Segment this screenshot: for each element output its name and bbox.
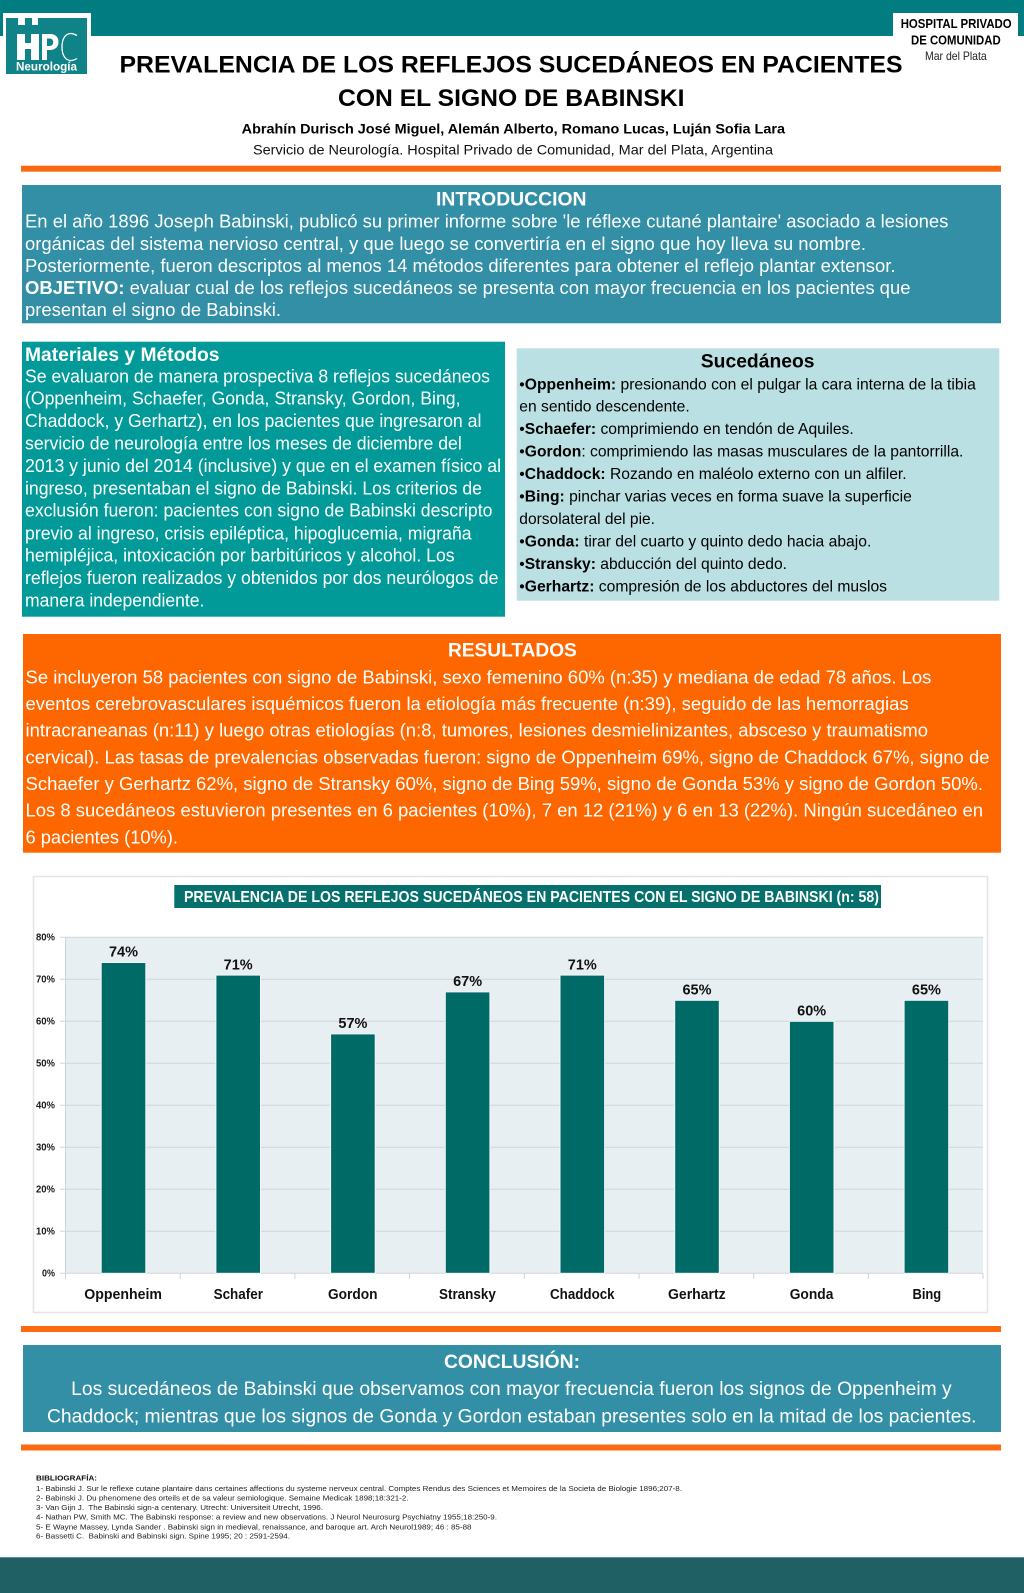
text: bibliografía: BIBLIOGRAFÍA: (36, 1474, 97, 1483)
y axis labels: 70% (36, 974, 55, 986)
text: sucedáneos list: en sentido descendente. (519, 399, 690, 416)
category labels (84, 1287, 941, 1303)
panel: sucedáneos (517, 348, 999, 601)
text: materiales y métodos body: Chaddock, y Gerhartz), en los pacientes que ingresaron al (25, 411, 481, 431)
text: sucedáneos list: •Chaddock: Rozando en maléolo externo con un alfiler. (519, 466, 907, 483)
hospital name label: Mar del Plata (925, 49, 987, 63)
text: resultados body (26, 667, 990, 847)
text: sucedáneos list: •Gonda: tirar del cuarto y quinto dedo hacia abajo. (519, 533, 871, 550)
bar value labels: 74% (109, 945, 138, 961)
bar value labels: 71% (568, 957, 597, 973)
text: resultados body: Schaefer y Gerhartz 62%, signo de Stransky 60%, signo de Bing 59%, signo de Gonda 53% y signo de Gordon 50%. (26, 774, 983, 794)
title (120, 51, 902, 112)
text: materiales y métodos body: manera independiente. (25, 591, 204, 611)
heading: introducción: INTRODUCCION (436, 190, 586, 210)
chart title (174, 885, 881, 908)
panel: resultados (23, 634, 1001, 853)
text: materiales y métodos body: servicio de neurología entre los meses de diciembre del (25, 433, 462, 453)
heading: sucedáneos: Sucedáneos (701, 351, 814, 372)
text: resultados body: 6 pacientes (10%). (26, 827, 178, 847)
text: sucedáneos list: •Gordon: comprimiendo las masas musculares de la pantorrilla. (519, 444, 963, 461)
text: introducción body: OBJETIVO: evaluar cual de los reflejos sucedáneos se presenta con mayor frecuencia en los pacientes que (25, 278, 910, 298)
text: introducción body: presentan el signo de Babinski. (25, 300, 281, 320)
text: resultados body: cervical). Las tasas de prevalencias observadas fueron: signo de Oppenheim 69%, signo de Chaddock 67%, signo de (26, 747, 990, 767)
text: materiales y métodos body: (Oppenheim, Schaefer, Gonda, Stransky, Gordon, Bing, (25, 389, 460, 409)
text: materiales y métodos body: exclusión fueron: pacientes con signo de Babinski descripto (25, 501, 492, 521)
text: sucedáneos list: •Stransky: abducción del quinto dedo. (519, 556, 787, 573)
bar value labels: 65% (912, 982, 941, 998)
text: bibliografía: 3- Van Gijn J. The Babinski sign-a centenary. Utrecht: Universiteit Utrecht, 1996. (36, 1503, 323, 1512)
title: PREVALENCIA DE LOS REFLEJOS SUCEDÁNEOS EN PACIENTES (120, 51, 902, 79)
text: resultados body: eventos cerebrovasculares isquémicos fueron la etiología más frecuente (n:39), seguido de las hemorragias (26, 694, 909, 714)
icon: HPC Neurología logo (3, 13, 91, 75)
text: bibliografía: 5- E Wayne Massey, Lynda Sander . Babinski sign in medieval, renaissance, and baroque art. Arch Neurol1989; 46 : 85-88 (36, 1522, 472, 1531)
category labels: Oppenheim (84, 1287, 162, 1303)
bar value labels: 65% (682, 982, 712, 998)
text: sucedáneos list: dorsolateral del pie. (519, 511, 655, 528)
category labels: Bing (912, 1287, 941, 1303)
category labels: Schafer (214, 1287, 263, 1303)
text: sucedáneos list: •Oppenheim: presionando con el pulgar la cara interna de la tibia (519, 376, 976, 393)
y axis labels: 60% (36, 1016, 55, 1028)
text: bibliografía: 4- Nathan PW, Smith MC. The Babinski response: a review and new observations. J Neurol Neurosurg Psychiatny 1955;18:250-9. (36, 1512, 497, 1521)
category labels: Gerhartz (668, 1287, 726, 1303)
chart title: PREVALENCIA DE LOS REFLEJOS SUCEDÁNEOS EN PACIENTES CON EL SIGNO DE BABINSKI (n: 58) (184, 889, 879, 906)
y axis labels: 20% (36, 1184, 55, 1196)
bar value labels: 57% (338, 1016, 368, 1032)
text: sucedáneos list: •Schaefer: comprimiendo en tendón de Aquiles. (519, 421, 854, 438)
text: conclusión body (47, 1379, 976, 1428)
y axis labels: 10% (36, 1226, 55, 1238)
text: sucedáneos list: •Gerhartz: compresión de los abductores del muslos (519, 578, 887, 595)
bar value labels: 67% (453, 974, 482, 990)
affiliation: Servicio de Neurología. Hospital Privado de Comunidad, Mar del Plata, Argentina (253, 142, 773, 158)
text: sucedáneos list: •Bing: pinchar varias veces en forma suave la superficie (519, 489, 912, 506)
hospital name label: HOSPITAL PRIVADO (901, 16, 1012, 31)
text: introducción body: Posteriormente, fueron descriptos al menos 14 métodos diferentes para obtener el reflejo plantar extensor. (25, 256, 896, 276)
panel: introducción (22, 185, 1001, 323)
bar value labels: 60% (797, 1004, 826, 1020)
bar value labels: 71% (224, 957, 253, 973)
category labels: Stransky (439, 1287, 496, 1303)
bar value labels (109, 945, 941, 1032)
y axis labels: 30% (36, 1142, 55, 1154)
y axis labels: 80% (36, 932, 55, 944)
text: introducción body: En el año 1896 Joseph Babinski, publicó su primer informe sobre 'le réflexe cutané plantaire' asociado a lesiones (25, 212, 948, 232)
bar chart: prevalencia de reflejos (34, 876, 988, 1312)
text: introducción body (25, 212, 948, 320)
text: bibliografía (36, 1474, 682, 1541)
text: bibliografía: 6- Bassetti C. Babinski and Babinski sign. Spine 1995; 20 : 2591-2594. (36, 1532, 290, 1541)
title: CON EL SIGNO DE BABINSKI (338, 85, 684, 112)
panel: materiales y métodos (22, 342, 505, 617)
hospital name label (893, 13, 1018, 63)
text: conclusión body: Los sucedáneos de Babinski que observamos con mayor frecuencia fueron los signos de Oppenheim y (71, 1379, 952, 1400)
y axis labels: 50% (36, 1058, 55, 1070)
bars (101, 962, 949, 1273)
text: bibliografía: 1- Babinski J. Sur le reflexe cutane plantaire dans certaines affections du systeme nerveux central. Comptes Rendus des Sciences et Memoires de la Societa de Biologie 1896;207-8. (36, 1484, 682, 1493)
text: materiales y métodos body: Se evaluaron de manera prospectiva 8 reflejos sucedáneos (25, 366, 490, 386)
text: materiales y métodos body: ingreso, presentaban el signo de Babinski. Los criterios de (25, 478, 482, 498)
text: materiales y métodos body: previo al ingreso, crisis epiléptica, hipoglucemia, migraña (25, 523, 473, 543)
heading: conclusión: CONCLUSIÓN: (444, 1351, 580, 1373)
text: resultados body: intracraneanas (n:11) y luego otras etiologías (n:8, tumores, lesiones desmielinizantes, absceso y traumatismo (26, 721, 928, 741)
text: materiales y métodos body: 2013 y junio del 2014 (inclusive) y que en el examen físico al (25, 456, 501, 476)
bottom footer bar (0, 1557, 1024, 1593)
text: resultados body: Se incluyeron 58 pacientes con signo de Babinski, sexo femenino 60% (n:35) y mediana de edad 78 años. Los (26, 667, 931, 687)
category labels: Gonda (790, 1287, 834, 1303)
y axis labels: 0% (42, 1268, 55, 1280)
text: materiales y métodos body (25, 366, 501, 611)
icon: HPC Neurología logo: Neurología (16, 62, 78, 74)
category labels: Gordon (328, 1287, 378, 1303)
text: bibliografía: 2- Babinski J. Du phenomene des orteils et de sa valeur semiologique. Semaine Medicak 1898;18:321-2. (36, 1494, 409, 1503)
panel: conclusión (23, 1345, 1001, 1432)
text: introducción body: orgánicas del sistema nervioso central, y que luego se convertiría en el signo que hoy lleva su nombre. (25, 234, 866, 254)
authors: Abrahín Durisch José Miguel, Alemán Alberto, Romano Lucas, Luján Sofia Lara (242, 120, 785, 136)
text: conclusión body: Chaddock; mientras que los signos de Gonda y Gordon estaban presentes solo en la mitad de los pacientes. (47, 1407, 976, 1428)
category labels: Chaddock (550, 1287, 615, 1303)
top header bar (0, 0, 1024, 36)
y axis labels (36, 932, 55, 1280)
text: materiales y métodos body: hemipléjica, intoxicación por barbitúricos y alcohol. Los (25, 546, 455, 566)
hospital name label: DE COMUNIDAD (911, 33, 1001, 48)
text: sucedáneos list (519, 376, 976, 595)
text: materiales y métodos body: reflejos fueron realizados y obtenidos por dos neurólogos de (25, 568, 498, 588)
text: resultados body: Los 8 sucedáneos estuvieron presentes en 6 pacientes (10%), 7 en 12 (21%) y 6 en 13 (22%). Ningún sucedáneo en (26, 801, 983, 821)
heading: materiales y métodos: Materiales y Métodos (25, 345, 219, 366)
y axis labels: 40% (36, 1100, 55, 1112)
heading: resultados: RESULTADOS (448, 640, 577, 662)
